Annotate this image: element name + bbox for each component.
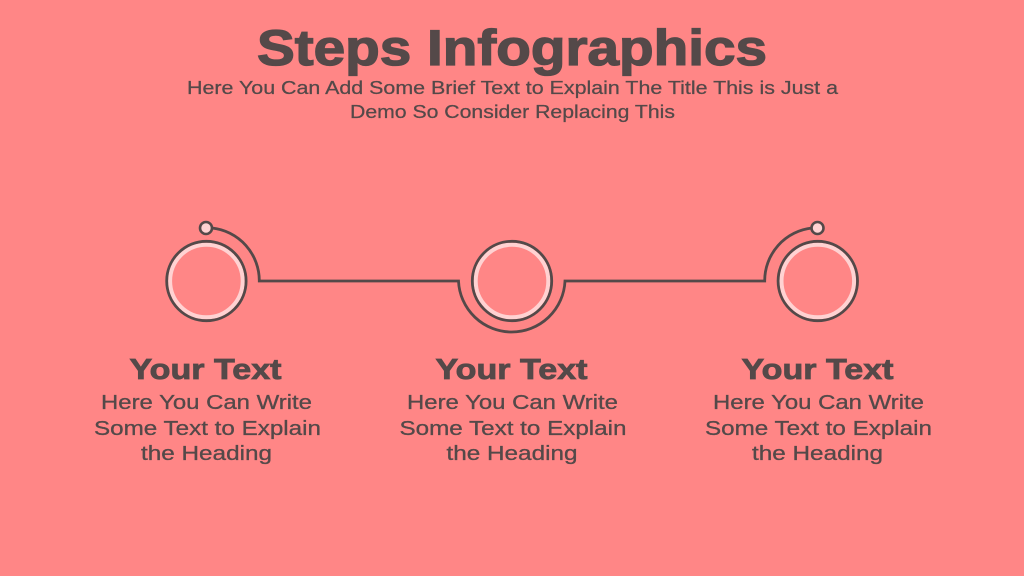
step 3 text: Here You Can Write (713, 392, 924, 414)
step 3 text (705, 354, 932, 465)
subtitle: Demo So Consider Replacing This (350, 101, 675, 122)
step 1 marker dot (200, 222, 212, 234)
connector line (212, 228, 812, 332)
step 3 text: Some Text to Explain (705, 418, 932, 440)
step 2 text: the Heading (446, 443, 578, 465)
step 3 circle (778, 241, 858, 321)
step 2 circle (472, 241, 552, 321)
subtitle (187, 77, 839, 122)
step 2 text (400, 354, 626, 465)
step 1 text: Here You Can Write (101, 392, 312, 414)
step 1 text (94, 354, 321, 465)
step 1 text: Your Text (130, 354, 282, 386)
subtitle: Here You Can Add Some Brief Text to Explain The Title This is Just a (187, 77, 839, 98)
step 1 circle (167, 241, 246, 321)
step 3 marker dot (812, 222, 824, 234)
step 1 text: Some Text to Explain (94, 418, 321, 440)
step 3 text: the Heading (752, 443, 883, 465)
step 1 text: the Heading (141, 443, 272, 465)
title: Steps Infographics (257, 20, 767, 76)
step 2 text: Your Text (436, 354, 588, 386)
step 2 text: Some Text to Explain (400, 418, 626, 440)
step 2 text: Here You Can Write (407, 392, 618, 414)
step 3 text: Your Text (742, 354, 894, 386)
